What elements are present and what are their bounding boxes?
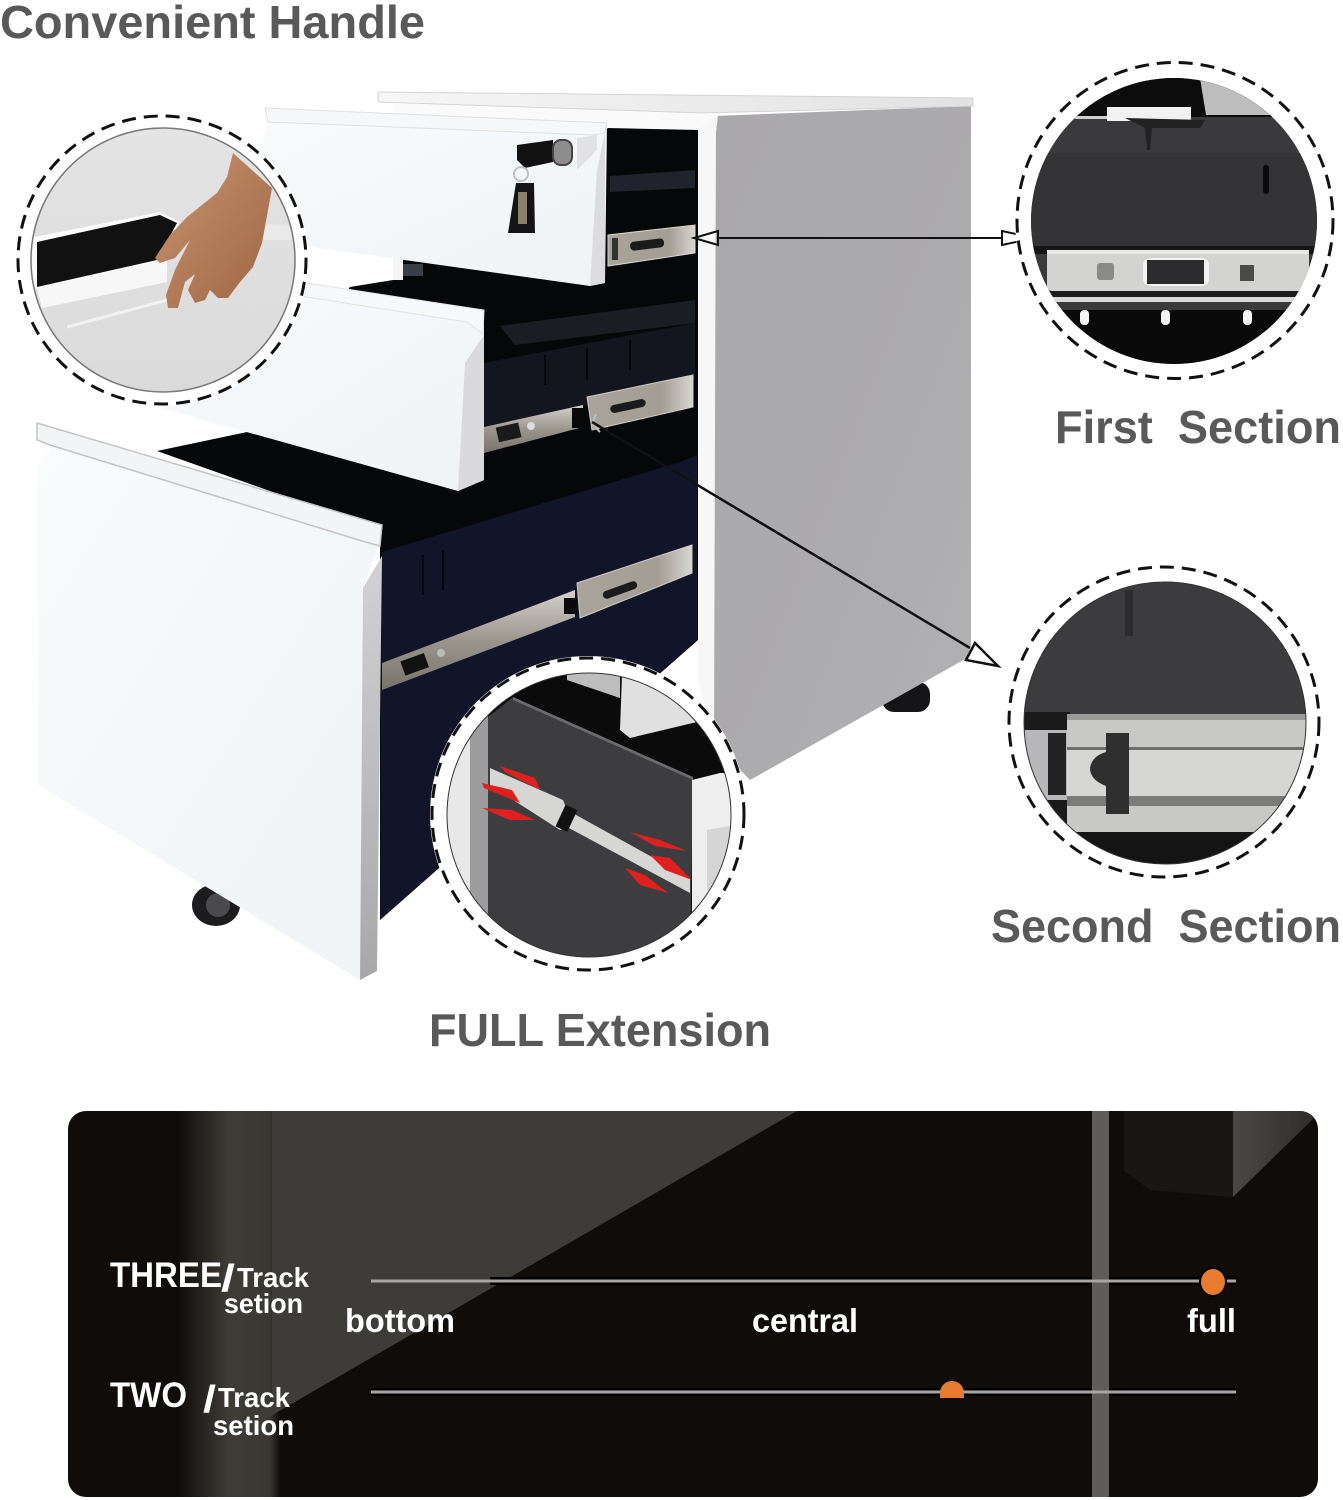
position labels: bottom	[345, 1302, 455, 1339]
third drawer front	[37, 423, 382, 980]
filing cabinet illustration	[37, 92, 973, 980]
second drawer slide	[484, 375, 693, 453]
callout: full extension detail	[430, 656, 746, 972]
rear caster wheel	[882, 682, 930, 712]
hand	[155, 153, 272, 308]
callout arrow to second section	[592, 422, 998, 666]
track line halos	[371, 1281, 1236, 1392]
callout: handle detail	[16, 114, 310, 406]
position labels: central	[752, 1302, 858, 1339]
three track row: Track	[237, 1262, 309, 1293]
two track row: Track	[218, 1382, 290, 1413]
label: First Section: First Section	[1055, 401, 1341, 453]
white support and second drawer back	[393, 258, 423, 280]
top drawer front	[240, 108, 607, 286]
front frame post	[698, 116, 716, 742]
cabinet interior	[157, 128, 699, 920]
cabinet side panel	[714, 106, 971, 780]
red direction arrows	[482, 766, 692, 893]
two track row: setion	[213, 1410, 294, 1441]
notch lines	[423, 340, 630, 595]
second drawer inner floor	[500, 300, 695, 345]
position labels	[345, 1302, 1236, 1339]
panel: track section comparison	[68, 1111, 1318, 1497]
second drawer inner wall	[484, 323, 695, 430]
callout: second section rail detail	[1007, 565, 1321, 879]
two track row	[110, 1376, 1236, 1441]
third drawer inner wall	[380, 455, 697, 920]
three track row: THREE	[110, 1256, 222, 1295]
label: FULL Extension: FULL Extension	[429, 1004, 771, 1056]
two track row: /	[203, 1379, 217, 1421]
front caster wheel	[192, 884, 240, 926]
label: Second Section: Second Section	[991, 900, 1341, 952]
third drawer slide	[382, 545, 692, 690]
second drawer front	[150, 272, 484, 491]
two track row: TWO	[110, 1376, 187, 1415]
callout arrow to first section	[694, 231, 1034, 245]
top drawer shelf	[610, 170, 695, 192]
top drawer slide	[608, 225, 695, 266]
front header strip	[395, 103, 718, 132]
three track row	[110, 1256, 1236, 1319]
cabinet top plate	[378, 92, 973, 113]
three track row: setion	[224, 1288, 303, 1319]
three track row: /	[221, 1258, 236, 1300]
lock and key	[508, 140, 572, 233]
position labels: full	[1187, 1302, 1236, 1339]
callout: first section rail detail	[1015, 60, 1335, 380]
